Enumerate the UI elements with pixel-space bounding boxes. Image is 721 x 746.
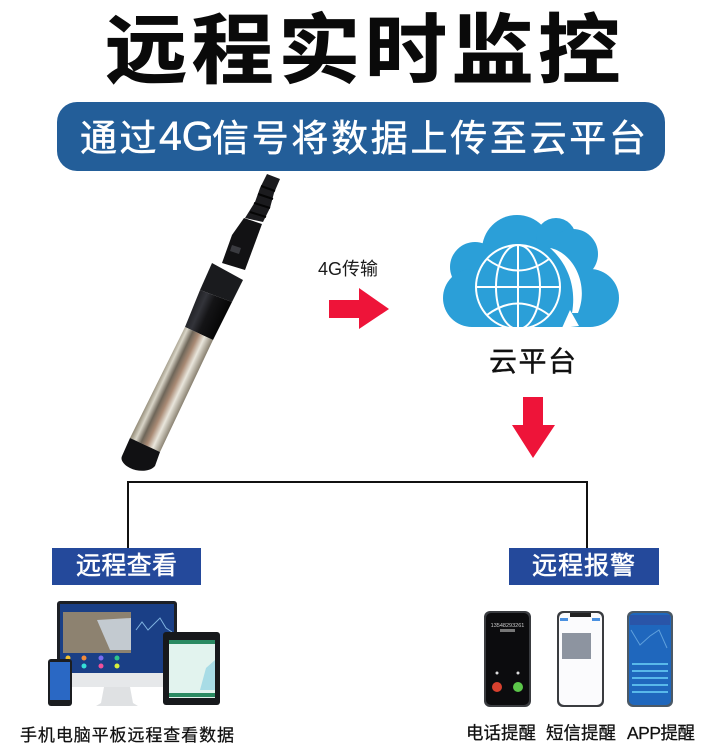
banner: subtitle: 信号将数据上传至云平台 bbox=[212, 118, 649, 159]
phone: app alert bbox=[627, 611, 673, 707]
icon: cloud platform bbox=[443, 215, 619, 329]
black body bbox=[185, 290, 232, 340]
title: 远程实时监控 bbox=[105, 8, 620, 93]
arrow: down bbox=[512, 397, 555, 458]
steel tube bbox=[130, 327, 213, 452]
label: cloud platform: 云平台 bbox=[489, 346, 576, 377]
threaded collar bbox=[200, 263, 243, 302]
sensor probe bbox=[121, 174, 280, 471]
phone: call alert: 13548293261 bbox=[491, 623, 524, 629]
phone: call alert bbox=[484, 611, 531, 707]
banner: subtitle bbox=[57, 102, 665, 171]
connector neck bbox=[222, 218, 262, 270]
connector lines bbox=[128, 482, 587, 548]
tablet bbox=[163, 632, 220, 705]
globe bbox=[476, 245, 560, 329]
end cap bbox=[121, 438, 160, 471]
arrow: to cloud bbox=[329, 288, 389, 329]
label: 4G transmission: 4G传输 bbox=[318, 259, 378, 279]
phone: SMS alert bbox=[557, 611, 604, 707]
tag: remote alarm: 远程报警 bbox=[532, 552, 635, 580]
tag: remote viewing: 远程查看 bbox=[76, 552, 177, 580]
caption: call alert: 电话提醒 bbox=[466, 723, 536, 743]
caption: devices: 手机电脑平板远程查看数据 bbox=[20, 726, 234, 745]
banner: subtitle: 通过 bbox=[80, 118, 159, 159]
refresh arrow bbox=[550, 248, 582, 313]
caption: APP alert: APP提醒 bbox=[627, 723, 695, 743]
phone bbox=[48, 659, 72, 706]
caption: SMS alert: 短信提醒 bbox=[546, 723, 616, 743]
tag: remote viewing bbox=[52, 548, 201, 585]
banner: subtitle: 4G bbox=[159, 113, 214, 159]
monitor bbox=[57, 601, 177, 687]
cable bbox=[245, 174, 280, 222]
devices: monitor, phone, tablet bbox=[48, 601, 220, 706]
tag: remote alarm bbox=[509, 548, 659, 585]
